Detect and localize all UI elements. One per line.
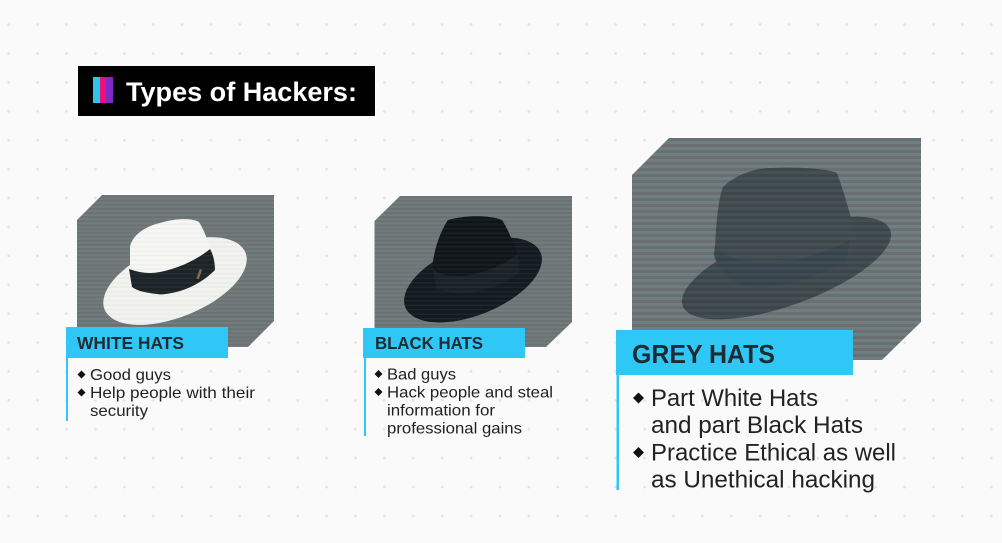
- title banner: [78, 66, 375, 116]
- icon: tricolour bars: [93, 77, 113, 103]
- bullet list: grey hats: [616, 375, 896, 494]
- label: grey hats: [616, 330, 853, 375]
- label: black hats: [363, 328, 525, 358]
- bullet list: black hats: Bad guys: [387, 366, 456, 384]
- panel: white hats: [66, 195, 274, 421]
- bullet list: white hats: Help people with their: [90, 385, 256, 402]
- label: white hats: WHITE HATS: [77, 333, 184, 353]
- bullet list: black hats: Hack people and steal: [387, 384, 553, 402]
- image panel: grey hat: [632, 138, 921, 360]
- label: white hats: [66, 327, 228, 358]
- image panel: white hat: [77, 195, 274, 347]
- bullet list: black hats: [364, 358, 553, 438]
- bullet list: white hats: Good guys: [90, 367, 171, 384]
- panel: grey hats: [616, 138, 921, 494]
- bullet list: grey hats: as Unethical hacking: [651, 466, 875, 494]
- bullet list: white hats: [66, 358, 256, 421]
- panel: black hats: [363, 196, 572, 438]
- bullet list: grey hats: Part White Hats: [651, 385, 818, 412]
- label: grey hats: GREY HATS: [632, 341, 775, 369]
- bullet list: grey hats: and part Black Hats: [651, 412, 863, 439]
- bullet list: white hats: security: [90, 403, 148, 420]
- title: Types of Hackers:: [126, 77, 357, 107]
- image panel: black hat: [374, 196, 572, 347]
- label: black hats: BLACK HATS: [375, 333, 483, 353]
- bullet list: grey hats: Practice Ethical as well: [651, 440, 896, 466]
- bullet list: black hats: information for: [387, 402, 496, 420]
- bullet list: black hats: professional gains: [387, 420, 522, 438]
